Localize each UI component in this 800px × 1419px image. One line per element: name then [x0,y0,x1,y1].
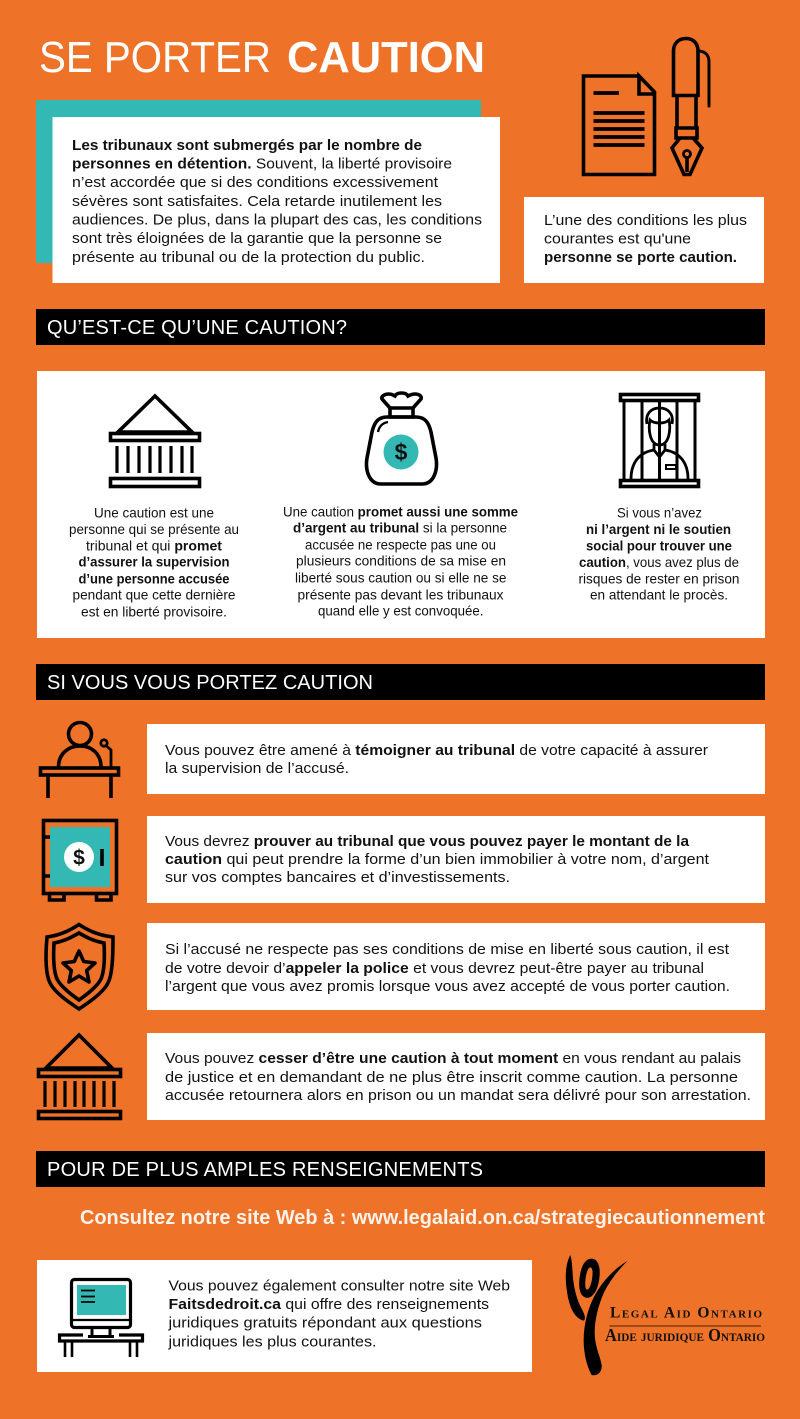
panel: stop being a surety: de justice et en demandant de ne plus être inscrit comme caution. La personne [165,1069,738,1086]
text: surety column 1: tribunal et qui promet [86,538,222,554]
text: surety column 1: personne qui se présente au [69,521,239,537]
logo: Legal Aid Ontario: Aide juridique Ontario [605,1325,765,1345]
icon: person behind bars [620,394,698,486]
text: surety column 2: d’argent au tribunal si la personne [293,520,507,536]
text: surety column 3: ni l’argent ni le soutien [586,521,731,537]
heading: what is a surety: QU’EST-CE QU’UNE CAUTION? [47,317,347,339]
panel: most common condition: L’une des conditions les plus [544,212,747,229]
text: surety column 1: est en liberté provisoire. [81,604,227,620]
text: surety column 2: présente pas devant les tribunaux [298,586,504,602]
text: surety column 2: quand elle y est convoquée. [318,602,484,618]
text: Faitsdedroit: juridiques gratuits répondant aux questions [167,1314,482,1332]
text: introduction: audiences. De plus, dans la plupart des cas, les conditions [72,212,482,228]
title [39,33,485,82]
icon: money bag [367,393,436,484]
icon: document and fountain pen [584,38,709,174]
text: Faitsdedroit: Faitsdedroit.ca qui offre des renseignements [168,1296,489,1313]
text: surety column 3: social pour trouver une [586,538,732,554]
text: introduction [72,137,482,266]
icon: safe: $ [73,846,85,870]
text: surety column 1: Une caution est une [94,504,214,520]
panel: most common condition: personne se porte caution. [544,249,737,266]
panel: testify [147,724,765,794]
panel: what is a surety [37,371,765,638]
panel: stop being a surety: Vous pouvez cesser d’être une caution à tout moment en vous rendant au palais [165,1050,741,1067]
title: SE PORTER [39,33,271,82]
text: Faitsdedroit [167,1278,510,1350]
text: introduction: sévères sont satisfaites. Cela retarde inutilement les [72,193,442,210]
text: introduction: présente au tribunal ou de la protection du public. [72,249,425,266]
panel: prove ability to pay: caution qui peut prendre la forme d’un bien immobilier à votre nom, d’argent [165,851,710,868]
text: introduction: personnes en détention. Souvent, la liberté provisoire [72,156,452,172]
panel: call the police: de votre devoir d’ appeler la police et vous devrez peut-être payer au tribunal [165,960,704,977]
panel: testify: la supervision de l’accusé. [165,760,349,777]
title: CAUTION [287,33,485,82]
text: surety column 2: accusée ne respecte pas une ou [305,536,496,552]
panel: most common condition [524,197,764,283]
icon: courthouse [110,396,200,486]
heading: what is a surety [36,309,765,345]
icon: money bag: $ [395,439,408,465]
icon: safe [44,820,116,900]
logo: Legal Aid Ontario [566,1255,765,1375]
panel: stop being a surety [147,1033,765,1120]
text: surety column 3: en attendant le procès. [590,586,728,602]
text: surety column 2 [283,504,518,618]
website link text: Consultez notre site Web à : www.legalaid.on.ca/strategiecautionnement [80,1207,765,1229]
text: surety column 1: d’assurer la supervision [78,554,230,570]
icon: courthouse small [38,1035,120,1118]
logo figure [566,1255,627,1375]
text: surety column 2: Une caution promet aussi une somme [283,504,518,520]
text: surety column 1: d’une personne accusée [78,570,230,586]
text: introduction: Les tribunaux sont submergés par le nombre de [72,137,422,154]
text: introduction: sont très éloignées de la garantie que la personne se [72,230,442,247]
panel: introduction [36,100,500,283]
panel: stop being a surety: accusée retournera alors en prison ou un mandat sera délivré pour son arrestation. [165,1087,751,1104]
panel: prove ability to pay [147,816,765,903]
panel: call the police [147,923,765,1010]
panel: Faitsdedroit [37,1260,532,1372]
text: surety column 1 [69,504,239,620]
text: surety column 3: risques de rester en prison [578,570,740,586]
text: surety column 2: liberté sous caution ou si elle ne se [295,570,507,586]
panel: most common condition: courantes est qu'une [544,230,691,248]
icon: person testifying [40,722,118,798]
text: surety column 3 [578,504,740,602]
heading: more information: POUR DE PLUS AMPLES RENSEIGNEMENTS [47,1159,483,1181]
icon: computer on desk [60,1280,142,1357]
icon: police shield [46,924,113,1009]
text: surety column 3: Si vous n’avez [617,504,702,520]
heading: if you become a surety [36,664,765,700]
logo: Legal Aid Ontario: Legal Aid Ontario [610,1304,762,1322]
text: surety column 3: caution, vous avez plus de [579,554,739,570]
panel: prove ability to pay: Vous devrez prouver au tribunal que vous pouvez payer le montant de la [165,833,690,850]
text: surety column 1: pendant que cette dernière [72,586,236,602]
text: introduction: n’est accordée que si des conditions excessivement [72,174,439,191]
panel: call the police: l’argent que vous avez promis lorsque vous avez accepté de vous porter caution. [165,978,730,995]
text: Faitsdedroit: juridiques les plus courantes. [167,1334,376,1350]
text: surety column 2: plusieurs conditions de sa mise en [296,552,506,568]
text: Faitsdedroit: Vous pouvez également consulter notre site Web [168,1278,510,1294]
panel: testify: Vous pouvez être amené à témoigner au tribunal de votre capacité à assurer [165,742,708,759]
heading: more information [36,1151,765,1187]
panel: call the police: Si l’accusé ne respecte pas ses conditions de mise en liberté sous caution, il est [165,941,730,958]
panel: prove ability to pay: sur vos comptes bancaires et d’investissements. [165,869,510,886]
heading: if you become a surety: SI VOUS VOUS PORTEZ CAUTION [47,672,373,694]
